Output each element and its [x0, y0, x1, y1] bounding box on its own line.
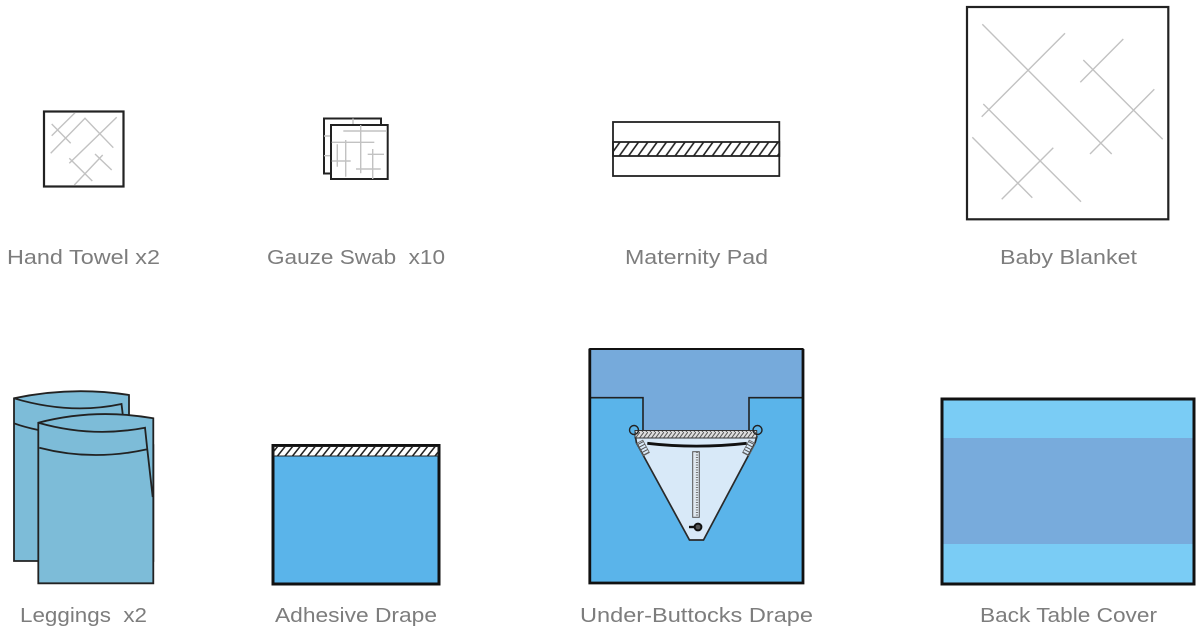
icon: under-buttocks drape — [590, 349, 803, 583]
icon: baby blanket — [967, 7, 1168, 219]
icon: hand towel — [44, 112, 124, 186]
label: hand towel: Hand Towel x2 — [7, 246, 160, 269]
label: back table cover: Back Table Cover — [980, 604, 1157, 627]
icon: leggings — [14, 391, 153, 583]
collection pouch — [630, 426, 762, 540]
icon: maternity pad — [613, 122, 779, 176]
label: adhesive drape: Adhesive Drape — [275, 604, 437, 627]
label: leggings: Leggings x2 — [20, 604, 147, 627]
label: under-buttocks drape: Under-Buttocks Drape — [580, 604, 813, 627]
drape body — [590, 349, 803, 583]
label: maternity pad: Maternity Pad — [625, 246, 768, 269]
icon: back table cover — [942, 399, 1194, 584]
front legging — [38, 414, 153, 583]
icon: adhesive drape — [273, 446, 439, 584]
back legging — [14, 391, 153, 561]
icon: gauze swab — [324, 118, 388, 179]
top panel — [590, 349, 803, 431]
label: gauze swab: Gauze Swab x10 — [267, 246, 445, 269]
label: baby blanket: Baby Blanket — [1000, 246, 1137, 269]
